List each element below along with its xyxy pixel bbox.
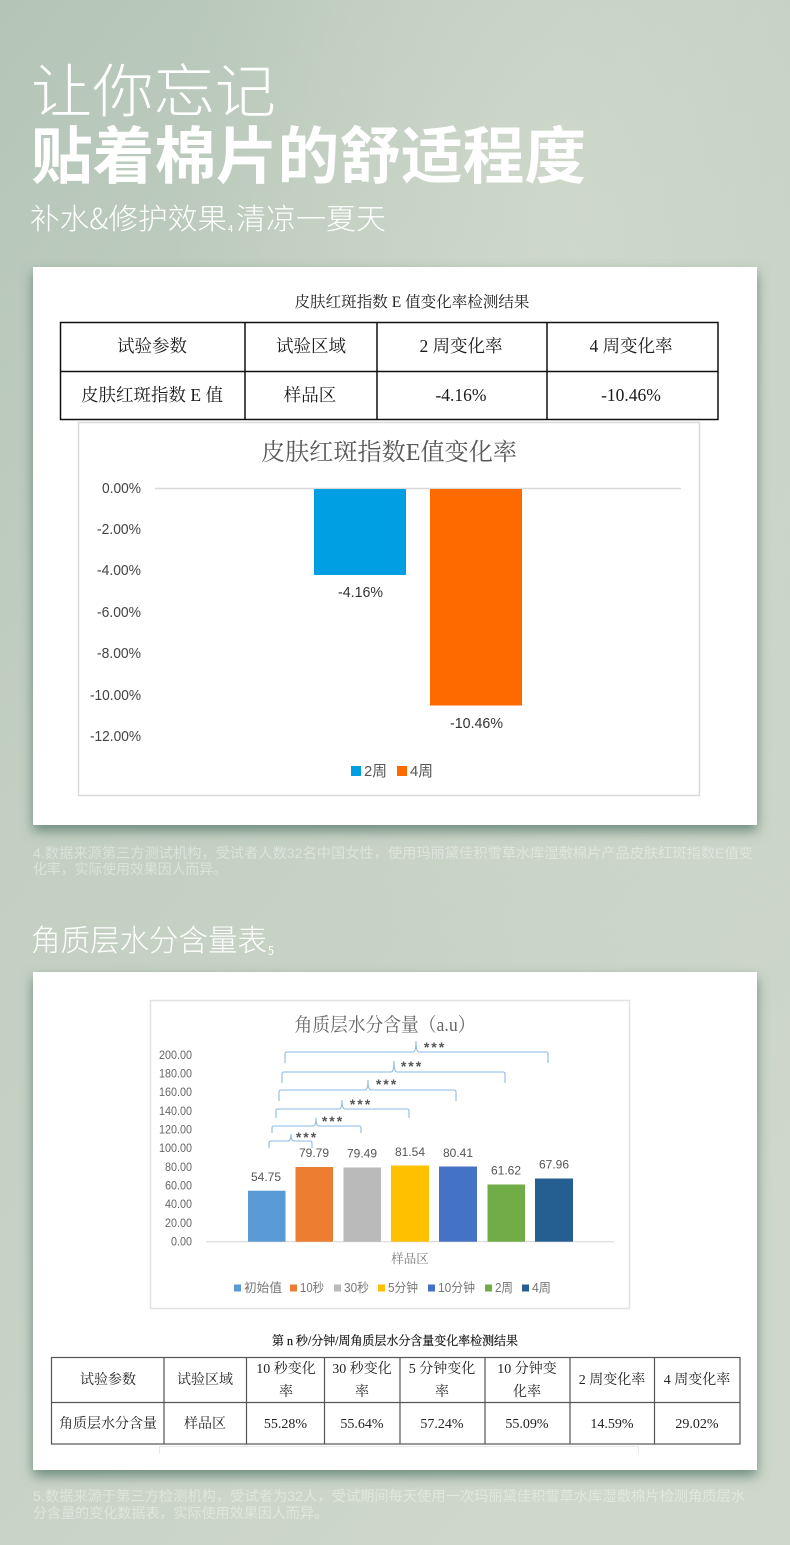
- footnote 4: [33, 845, 753, 877]
- table: moisture change rate: 57.24%: [420, 1417, 464, 1432]
- y axis labels: 80.00: [165, 1160, 192, 1174]
- significance stars: ***: [401, 1058, 423, 1074]
- bar: 4 weeks: [430, 489, 522, 706]
- table: erythema change rate: 2 周变化率: [419, 336, 503, 356]
- chart title: 皮肤红斑指数E值变化率: [261, 439, 517, 466]
- y axis labels: 160.00: [159, 1085, 192, 1099]
- data labels: 67.96: [539, 1158, 569, 1172]
- legend: 4周: [410, 763, 433, 780]
- y axis labels: 40.00: [165, 1197, 192, 1211]
- data labels: 79.79: [299, 1146, 329, 1160]
- title: light line: 让你忘记: [31, 45, 276, 129]
- table: moisture change rate: 率: [279, 1384, 293, 1400]
- subtitle: 4: [228, 222, 233, 235]
- significance stars: ***: [376, 1076, 398, 1092]
- data labels: -10.46%: [450, 715, 503, 732]
- legend: 2周: [495, 1281, 513, 1295]
- table: moisture change rate: 化率: [513, 1384, 541, 1400]
- table: erythema change rate: 4 周变化率: [589, 336, 673, 356]
- legend: 30秒: [344, 1281, 369, 1295]
- title: bold line: 贴着棉片的舒适程度: [31, 106, 586, 196]
- table: erythema change rate: 试验参数: [117, 336, 187, 356]
- table: erythema change rate: -10.46%: [601, 385, 661, 405]
- table: moisture change rate: 55.09%: [505, 1417, 549, 1432]
- legend: [234, 1280, 551, 1295]
- table: erythema change rate: -4.16%: [435, 385, 487, 405]
- data labels: 80.41: [443, 1146, 473, 1160]
- y axis labels: -6.00%: [97, 604, 141, 621]
- y axis labels: -8.00%: [97, 645, 141, 662]
- y axis labels: 0.00%: [102, 480, 141, 497]
- y axis labels: -2.00%: [97, 521, 141, 538]
- footnote 5: 5.数据来源于第三方检测机构，受试者为32人，受试期间每天使用一次玛丽黛佳积雪草水库湿敷棉片检测角质层水: [33, 1488, 745, 1504]
- table: moisture change rate: 29.02%: [675, 1417, 719, 1432]
- table: moisture change rate: 试验参数: [80, 1371, 136, 1388]
- subtitle: 补水&修护效果: [30, 196, 227, 238]
- data labels: -4.16%: [338, 584, 383, 601]
- data labels: [251, 1145, 569, 1184]
- table: moisture change rate: [51, 1357, 740, 1444]
- table: moisture change rate: 率: [355, 1384, 369, 1400]
- panel: moisture content: [33, 972, 757, 1470]
- table: moisture change rate: 样品区: [184, 1415, 226, 1432]
- table: moisture change rate: 5 分钟变化: [409, 1360, 475, 1377]
- y axis labels: -4.00%: [97, 562, 141, 579]
- y axis labels: -12.00%: [90, 728, 141, 745]
- subtitle: 清凉一夏天: [236, 196, 386, 238]
- table: moisture change rate: 55.64%: [340, 1417, 384, 1432]
- legend: 10秒: [300, 1281, 324, 1295]
- significance stars: ***: [296, 1129, 318, 1145]
- subtitle: [30, 196, 386, 238]
- data labels: [338, 584, 503, 732]
- y axis labels: 60.00: [165, 1178, 192, 1192]
- legend: [351, 763, 433, 780]
- panel: erythema index: [33, 267, 757, 825]
- significance stars: ***: [424, 1039, 446, 1055]
- table: moisture change rate: 14.59%: [590, 1417, 634, 1432]
- legend: 5分钟: [388, 1280, 418, 1295]
- section heading: stratum corneum moisture: 角质层水分含量表: [31, 916, 267, 960]
- footnote 5: 分含量的变化数据表，实际使用效果因人而异。: [33, 1505, 328, 1521]
- bar: 2 weeks: [314, 489, 406, 575]
- table: erythema change rate: 试验区域: [276, 336, 346, 356]
- table: moisture change rate: 4 周变化率: [664, 1371, 730, 1388]
- footnote 4: 4.数据来源第三方测试机构，受试者人数32名中国女性，使用玛丽黛佳积雪草水库湿敷棉片产品皮肤红斑指数E值变: [33, 845, 753, 861]
- y axis labels: [159, 1048, 192, 1248]
- y axis labels: [90, 480, 141, 745]
- legend: 初始值: [244, 1280, 282, 1295]
- significance stars: ***: [322, 1113, 344, 1129]
- table: erythema change rate: 皮肤红斑指数 E 值: [81, 385, 223, 405]
- y axis labels: 100.00: [159, 1141, 192, 1155]
- legend: 4周: [532, 1281, 551, 1295]
- table: moisture change rate: 角质层水分含量: [59, 1415, 157, 1432]
- section heading: stratum corneum moisture: 5: [268, 942, 274, 959]
- table: erythema change rate: [60, 322, 718, 420]
- y axis labels: 140.00: [159, 1104, 192, 1118]
- chart title: 角质层水分含量（a.u）: [294, 1014, 476, 1036]
- y axis labels: 200.00: [159, 1048, 192, 1062]
- bar chart: moisture content: [150, 1000, 630, 1308]
- table title: 皮肤红斑指数 E 值变化率检测结果: [294, 292, 530, 311]
- significance stars: [296, 1039, 446, 1145]
- y axis labels: 20.00: [165, 1216, 192, 1230]
- legend: 10分钟: [438, 1280, 475, 1295]
- table: moisture change rate: 2 周变化率: [579, 1371, 645, 1388]
- table: moisture change rate: 10 分钟变: [497, 1360, 557, 1377]
- data labels: 79.49: [347, 1146, 377, 1160]
- table: moisture change rate: 30 秒变化: [332, 1360, 392, 1377]
- significance brackets: [269, 1041, 548, 1148]
- table: moisture change rate: 试验区域: [177, 1372, 233, 1388]
- table title: 第 n 秒/分钟/周角质层水分含量变化率检测结果: [272, 1333, 518, 1348]
- y axis labels: 0.00: [171, 1234, 192, 1248]
- bars: [248, 1166, 573, 1242]
- y axis labels: 120.00: [159, 1122, 192, 1136]
- category label: 样品区: [391, 1251, 429, 1266]
- table: moisture change rate: 10 秒变化: [256, 1360, 316, 1377]
- y axis labels: -10.00%: [90, 687, 141, 704]
- table: moisture change rate: 率: [435, 1384, 449, 1400]
- data labels: 81.54: [395, 1145, 425, 1159]
- footnote 5: [33, 1488, 745, 1521]
- table: erythema change rate: 样品区: [284, 385, 336, 405]
- data labels: 54.75: [251, 1170, 281, 1184]
- significance stars: ***: [350, 1096, 372, 1112]
- footnote 4: 化率，实际使用效果因人而异。: [33, 861, 227, 877]
- table: moisture change rate: 55.28%: [264, 1417, 307, 1432]
- legend: 2周: [364, 763, 387, 780]
- y axis labels: 180.00: [159, 1066, 192, 1080]
- bar chart: erythema change: [78, 422, 700, 796]
- data labels: 61.62: [491, 1164, 521, 1178]
